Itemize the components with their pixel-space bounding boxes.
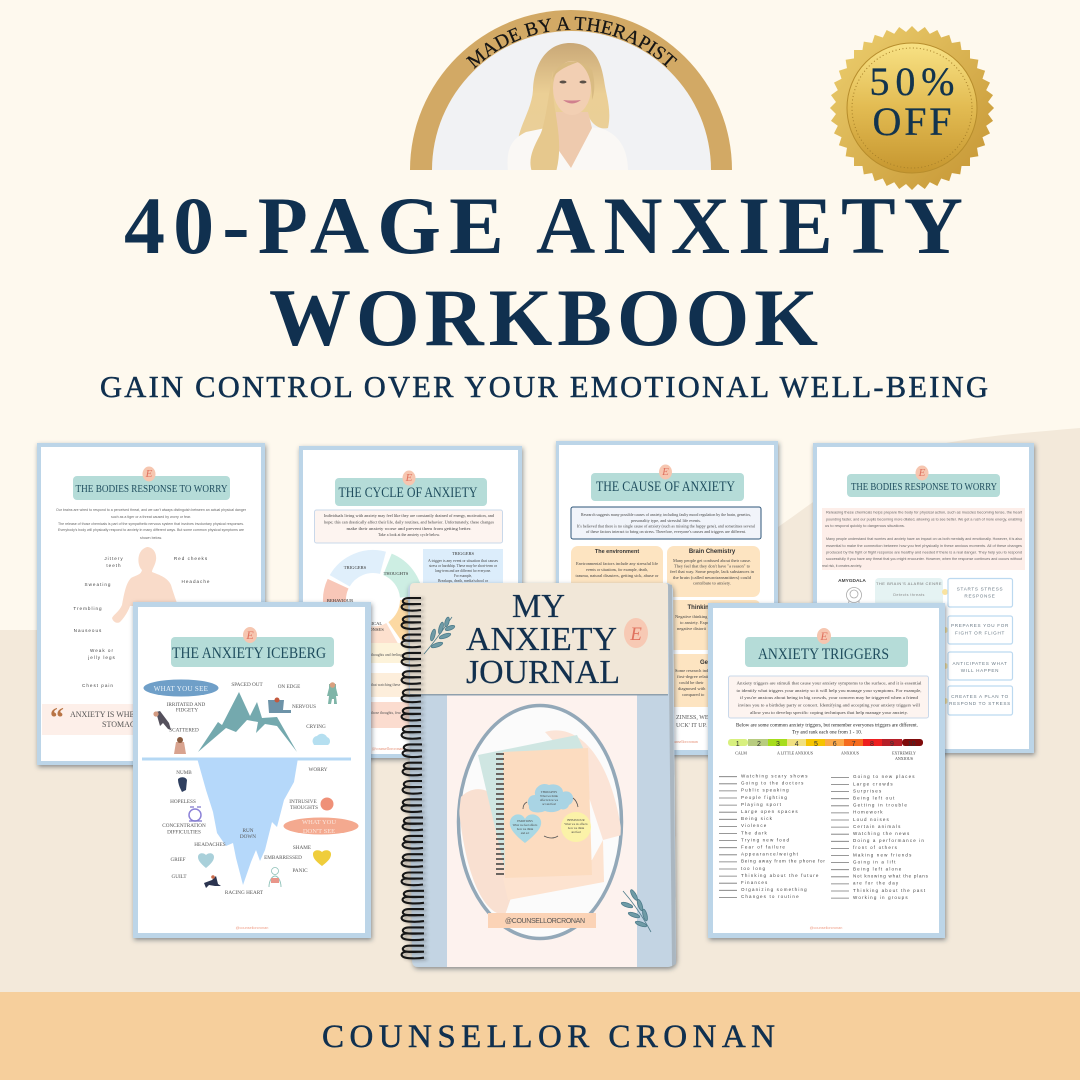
environment box: The environment — [595, 549, 639, 555]
trigger list: left: People fighting — [741, 795, 788, 800]
response boxes: WILL HAPPEN — [961, 668, 999, 673]
triggers box: long-term and are different for everyone. — [435, 568, 491, 573]
intro text — [56, 508, 247, 540]
page heading: THE BODIES RESPONSE TO WORRY — [851, 481, 997, 493]
explanatory text block: real risk, it creates anxiety. — [822, 564, 862, 568]
trigger list: right: front of others — [853, 845, 898, 850]
mini cycle text: BEHAVIOUR — [567, 818, 585, 822]
trigger list: right: are for the day — [853, 881, 899, 886]
journal title: JOURNAL — [466, 654, 620, 691]
iceberg labels: EMBARRESSED — [264, 855, 302, 861]
symptom labels: teeth — [106, 563, 122, 568]
badge text: 50% — [870, 59, 954, 104]
amygdala label: AMYGDALA — [838, 578, 866, 584]
response boxes: STARTS STRESS — [957, 586, 1003, 592]
trigger list: left: Appearance/weight — [741, 852, 799, 857]
anxiety scale: 7 — [852, 741, 856, 748]
arch ring — [410, 10, 732, 170]
title — [124, 180, 963, 363]
mini cycle text: What we think — [540, 794, 558, 798]
intro box: Individuals living with anxiety may feel like they are constantly drained of energy, motivation, and — [324, 513, 495, 519]
journal title: ANXIETY — [466, 621, 617, 658]
page frame — [813, 443, 1034, 753]
cover page edge — [668, 584, 676, 966]
handle label — [488, 913, 596, 928]
page frame — [299, 446, 522, 758]
page frame — [708, 603, 945, 938]
trigger list: left: Fear of failure — [741, 844, 786, 850]
background wave — [0, 428, 1080, 1080]
response boxes: ANTICIPATES WHAT — [952, 661, 1008, 666]
footer note: ounsellorcronan — [672, 739, 698, 744]
trigger list: right: Doing a performance in — [853, 838, 925, 843]
page heading: E — [819, 629, 828, 643]
body silhouette — [112, 547, 178, 623]
explanatory text block: pounding faster, and our pupils becoming more dilated, allowing us to see better. We get a rush of more energy, enabling — [826, 518, 1022, 522]
anxiety scale: 4 — [795, 741, 799, 748]
page heading: E — [145, 468, 153, 480]
quote band: ANXIETY IS WHEN YOUR — [70, 710, 165, 719]
iceberg labels: GUILT — [171, 874, 187, 880]
genetics box: Ge — [700, 660, 709, 666]
panel: bodies response (right) — [813, 443, 1034, 753]
iceberg labels: ON EDGE — [278, 684, 300, 690]
trigger list: right: Being left out — [853, 796, 895, 800]
intro box: Take a look at the anxiety cycle below. — [378, 532, 440, 537]
response boxes: RESPOND TO STRESS — [949, 701, 1011, 706]
thinking box: to anxiety. Expe — [680, 620, 709, 625]
trigger list: right: Getting in trouble — [853, 803, 908, 808]
footer handle: @counsellorcronan — [810, 926, 842, 930]
cycle labels: THOUGHTS — [384, 571, 409, 576]
lower stripes: those thoughts, fear — [371, 711, 402, 716]
page heading: THE CAUSE OF ANXIETY — [596, 479, 735, 495]
trigger list: right: Loud noises — [853, 817, 890, 822]
iceberg labels: SCATTERED — [169, 728, 199, 734]
footer note: UCK' IT UP. — [676, 723, 707, 729]
anxiety scale: 1 — [736, 741, 740, 748]
genetics box: first-degree relativ — [677, 674, 711, 679]
alarm centre box: THE BRAIN'S ALARM CENRE — [876, 581, 942, 586]
alarm centre box: Detects threats — [893, 593, 925, 597]
lower stripes: @counsellorcronan — [372, 746, 403, 751]
anxiety scale: 6 — [833, 741, 837, 748]
symptom labels: Jittery — [104, 556, 124, 561]
intro box: Anxiety triggers are stimuli that cause your anxiety symptoms to the surface, and it is essential — [736, 680, 922, 686]
intro box — [728, 676, 928, 718]
page heading: THE CYCLE OF ANXIETY — [338, 485, 478, 501]
trigger list: left: The dark — [741, 830, 768, 835]
symptom labels: jelly legs — [87, 655, 116, 660]
page heading: ANXIETY TRIGGERS — [758, 646, 889, 663]
anxiety scale: 8 — [870, 741, 874, 748]
genetics box: could be their — [679, 680, 704, 685]
page heading — [171, 627, 334, 667]
brain chemistry box: contribute to anxiety. — [693, 580, 731, 586]
iceberg labels: GRIEF — [170, 857, 186, 863]
explanatory text block: essential to make the connection between how you feel physically in these anxious moments. All of these changes — [826, 544, 1022, 548]
iceberg labels: IRRITATED AND — [167, 702, 206, 708]
mini cycle text: What we feel affects — [513, 823, 538, 827]
trigger list: left: Large open spaces — [741, 809, 799, 814]
intro text: Our brains are wired to respond to a perceived threat, and we can't always distinguish between an actual physical danger — [56, 508, 247, 512]
genetics box — [620, 654, 760, 707]
panel: cause of anxiety — [556, 441, 778, 755]
response boxes: FIGHT OR FLIGHT — [955, 630, 1005, 636]
iceberg labels: WORRY — [308, 767, 328, 773]
footer handle: @counsellorcronan — [236, 926, 268, 930]
icon: brain head — [846, 588, 862, 606]
brain chemistry box — [667, 546, 760, 597]
scale instructions: Below are some common anxiety triggers, but remember everyones triggers are different. — [736, 724, 918, 728]
intro text: Everybody's body will physically respond to anxiety in many different ways. But some common physical symptoms are — [58, 528, 244, 532]
what you see pill — [144, 680, 218, 696]
trigger list: left: Watching scary shows — [741, 774, 809, 778]
cycle labels: BEHAVIOUR — [327, 598, 354, 603]
what you don't see pill — [284, 818, 358, 835]
what you see pill: WHAT YOU SEE — [154, 685, 208, 693]
environment box: trauma, natural disasters, getting sick, abuse or — [576, 573, 659, 579]
icon: leaf bottom — [621, 889, 651, 932]
symptom labels: Headache — [182, 579, 210, 584]
iceberg labels: INTRUSIVE — [289, 799, 317, 805]
scale labels: A LITTLE ANXIOUS — [777, 750, 813, 756]
thinking box: negative distorti — [677, 626, 707, 631]
symptom labels: Weak or — [90, 648, 114, 653]
symptom labels: Trembling — [73, 606, 103, 611]
trigger list: right: Homework — [853, 810, 884, 815]
triggers box — [423, 549, 503, 585]
trigger list: left: Thinking about the future — [741, 873, 820, 878]
explanatory text block: Many people understand that worries and anxiety have an impact on us both mentally and emotionally. However, it is also — [826, 537, 1022, 541]
cycle labels: RESPONSES — [358, 627, 384, 632]
cover title band — [410, 583, 668, 695]
iceberg labels: CONCENTRATION — [162, 823, 206, 829]
page heading: THE ANXIETY ICEBERG — [172, 645, 326, 662]
page heading — [335, 470, 487, 506]
mini cycle text: What we do affects — [564, 822, 588, 826]
anxiety scale: 9 — [890, 741, 894, 748]
trigger list: right: Surprises — [853, 788, 882, 793]
logo — [624, 618, 648, 648]
trigger list: right: Going to new places — [853, 774, 916, 779]
quote band: “ — [50, 703, 64, 734]
brain chemistry box: the brain (called neurotransmitters) could — [673, 575, 752, 580]
triggers box: TRIGGERS — [452, 551, 474, 556]
page heading — [745, 628, 908, 667]
mini cycle text: and feel — [571, 830, 581, 834]
trigger list: right: Not knowing what the plans — [853, 874, 929, 879]
scale labels: ANXIOUS — [895, 756, 913, 761]
footer brand: COUNSELLOR CRONAN — [322, 1019, 775, 1055]
waterline — [142, 758, 351, 760]
mountain — [198, 692, 297, 752]
trigger list: left: Finances — [741, 880, 768, 885]
iceberg labels: SPACED OUT — [231, 682, 264, 688]
lower stripes — [314, 643, 502, 751]
page heading: E — [405, 472, 413, 484]
explanatory text block — [822, 508, 1025, 570]
intro box: if you're anxious about being in big crowds, your concern may be triggered when a friend — [740, 695, 919, 701]
explanatory text block: us to respond quickly to dangerous situations. — [825, 524, 905, 528]
brain chemistry box: feel that way. Some people, lack substances in — [670, 569, 755, 575]
spiral binding — [402, 598, 424, 958]
page heading: THE BODIES RESPONSE TO WORRY — [76, 483, 228, 495]
mini cycle text — [513, 790, 588, 835]
triggers box: For example, — [454, 573, 472, 579]
page heading: E — [661, 466, 669, 478]
alarm centre box — [875, 578, 943, 606]
page heading — [591, 464, 744, 501]
mini cycle text: affects how we — [540, 798, 559, 802]
explanatory text block: produced by the fight or flight response are healthy and needed if there is a real danger. They help you to respond — [826, 550, 1022, 554]
iceberg labels: DOWN — [240, 834, 256, 840]
intro box — [314, 510, 502, 543]
triggers box: Breakups, death, media/school or — [438, 578, 488, 584]
thinking box: Negative thinking — [675, 614, 708, 619]
iceberg labels: PANIC — [292, 868, 308, 874]
logo: E — [629, 624, 642, 645]
intro box: It's believed that there is no single cause of anxiety (such as missing the happy gene), and sometimes several — [577, 524, 756, 530]
environment box: Environmental factors include any stressful life — [576, 561, 658, 566]
intro box: invites you to a birthday party or concert. Identifying and accepting your anxiety triggers will — [738, 702, 921, 708]
anxiety scale: 10 — [908, 741, 916, 748]
badge starburst — [830, 26, 994, 190]
scale instructions — [736, 724, 918, 736]
what you don't see pill: WHAT YOU — [302, 819, 336, 826]
trigger list: left: Being away from the phone for — [741, 859, 826, 864]
oval photo — [458, 706, 622, 938]
footer band — [0, 992, 1080, 1080]
title: WORKBOOK — [269, 272, 818, 363]
trigger list: left: Trying new food — [741, 837, 790, 842]
intro box: personality type, and stressful life events. — [631, 518, 701, 524]
trigger list: left: too long — [741, 866, 766, 871]
intro box: Research suggests many possible causes of anxiety, including faulty mood regulation by the brain, genetics, — [581, 512, 751, 518]
trigger list: left: Violence — [741, 823, 767, 828]
iceberg labels: DIFFICULTIES — [167, 830, 201, 836]
page frame — [133, 602, 371, 938]
trigger list: right: Watching the news — [853, 831, 910, 836]
page heading: E — [245, 628, 254, 642]
trigger list: right: Certain animals — [853, 824, 902, 829]
environment box — [571, 546, 663, 596]
symptom labels: Nauseous — [74, 628, 102, 633]
brain chemistry box: They feel that they don't have "a reason" to — [674, 564, 751, 568]
iceberg labels: HEADACHES — [194, 842, 226, 848]
title: 40-PAGE ANXIETY — [124, 180, 963, 271]
trigger list: right: Being left alone — [853, 866, 902, 872]
genetics box: diagnosed with — [678, 686, 706, 691]
brain chemistry box: Many people get confused about their cause. — [673, 558, 751, 563]
intro box: allow you to develop specific coping techniques that help manage your anxiety. — [750, 710, 908, 715]
genetics box: compared to — [682, 692, 705, 697]
intro text: such as a tiger or a threat caused by worry or fear. — [111, 515, 191, 519]
quote band — [42, 703, 257, 735]
explanatory text block: successfully if you have any threat that you might encounter. However, when the response continues and occurs without — [826, 557, 1022, 561]
symptom labels: Chest pain — [82, 683, 114, 688]
cycle labels: TRIGGERS — [344, 565, 367, 570]
cover base — [408, 583, 676, 967]
trigger list: right: Making new friends — [853, 852, 912, 857]
panel: anxiety iceberg — [133, 602, 371, 938]
thinking box: Thinking — [688, 605, 713, 611]
subtitle: GAIN CONTROL OVER YOUR EMOTIONAL WELL-BEING — [100, 370, 988, 404]
page frame — [556, 441, 778, 755]
icons: figures — [153, 682, 338, 888]
intro text: shown below. — [140, 536, 162, 540]
iceberg labels: NUMB — [176, 770, 192, 776]
cycle labels: PHYSICAL — [360, 621, 382, 626]
arch caption: MADE BY A THERAPIST — [466, 16, 678, 69]
mini cycle text: and act — [521, 831, 529, 835]
trigger list: left: Organizing something — [741, 887, 808, 892]
trigger list: left: Playing sport — [741, 802, 782, 807]
mini cycle: thoughts cloud — [528, 784, 573, 812]
scale labels — [735, 750, 916, 761]
symptom labels: Sweating — [85, 582, 111, 587]
trigger list: left: Going to the doctors — [741, 781, 805, 786]
response boxes: PREPARES YOU FOR — [951, 623, 1009, 628]
mini cycle text: act and feel — [542, 802, 556, 806]
mini cycle text: how we think — [568, 826, 585, 830]
journal title — [466, 588, 620, 691]
quote band: STOMACH — [102, 720, 141, 729]
explanatory text block: Releasing these chemicals helps prepare the body for physical action, such as muscles becoming tense, the heart — [826, 510, 1022, 514]
scale instructions: Try and rank each one from 1 - 10. — [792, 730, 862, 736]
anxiety scale: 2 — [757, 741, 761, 748]
scale labels: EXTREMELY — [892, 750, 916, 756]
anxiety scale: 3 — [776, 741, 780, 748]
panel: bodies response (left) — [37, 443, 265, 765]
badge: 50% off — [830, 26, 994, 190]
mini cycle: emotions heart — [510, 814, 541, 843]
what you don't see pill: DON'T SEE — [303, 828, 335, 835]
intro text: The release of those chemicals is part of the sympathetic nervous system that involves involuntary physical responses. — [58, 522, 244, 526]
anxiety scale: 5 — [814, 741, 818, 748]
icon: leaf top — [424, 617, 455, 654]
mini cycle text: how we think — [517, 827, 534, 831]
triggers box: stress or hardship. These may be short-term or — [429, 563, 497, 568]
mini cycle arrows — [523, 798, 578, 838]
iceberg labels: RACING HEART — [225, 890, 264, 896]
thinking box — [620, 600, 760, 650]
mini cycle text: THOUGHTS — [541, 790, 557, 794]
environment box: events or situations, for example, death, — [586, 567, 648, 573]
response boxes — [942, 578, 1012, 715]
response boxes: CREATES A PLAN TO — [951, 694, 1009, 699]
badge seal — [847, 43, 977, 173]
panel: cycle of anxiety — [299, 446, 522, 758]
trigger list: right — [831, 774, 929, 900]
scale labels: ANXIOUS — [841, 750, 859, 756]
submerged iceberg — [197, 758, 298, 885]
scale labels: CALM — [735, 750, 747, 756]
iceberg labels: NERVOUS — [292, 704, 316, 710]
handle label: @COUNSELLORCRONAN — [505, 918, 585, 925]
footer note — [672, 715, 718, 744]
iceberg labels: RUN — [243, 828, 254, 834]
badge text: OFF — [872, 99, 952, 144]
trigger list: left — [719, 774, 826, 899]
trigger list: left: Public speaking — [741, 788, 790, 793]
trigger list: right: Working in groups — [853, 895, 909, 900]
pink centre panel — [447, 695, 637, 967]
page heading: E — [918, 467, 926, 479]
footer note: ZINESS, WEAK — [676, 715, 718, 721]
mini cycle text: EMOTIONS — [517, 819, 533, 823]
page frame — [37, 443, 265, 765]
iceberg labels: FIDGETY — [176, 708, 198, 714]
cycle labels — [327, 565, 409, 632]
mini cycle: behaviour circle — [561, 812, 591, 842]
response boxes: RESPONSE — [964, 594, 996, 598]
panel: journal cover — [408, 583, 676, 967]
trigger list: left: Being sick — [741, 816, 773, 821]
intro box: hope; this can drastically affect their life, daily routines, and behavior. Unfortunately, these changes — [324, 520, 494, 526]
intro box — [571, 507, 761, 539]
symptom labels — [73, 556, 210, 688]
trigger list: right: Going in a lift — [853, 859, 897, 864]
intro box: make their anxiety worse and prevent them from getting better. — [346, 526, 472, 531]
page heading — [73, 466, 230, 500]
trigger list: right: Thinking about the past — [853, 888, 926, 893]
triggers box: A trigger is any event or situation that causes — [428, 558, 498, 563]
genetics box: Some research ind — [675, 668, 709, 673]
lower stripes: that watching these — [371, 683, 401, 687]
intro box: of these factors interact to bring on stress. Therefore, everyone's causes and triggers are different. — [586, 529, 746, 535]
panel: anxiety triggers — [708, 603, 945, 938]
brain chemistry box: Brain Chemistry — [689, 549, 736, 555]
trigger list: left: Changes to routine — [741, 894, 800, 899]
anxiety scale — [728, 739, 923, 748]
iceberg labels: THOUGHTS — [290, 805, 318, 811]
page heading — [847, 466, 1000, 497]
lower stripes: thoughts and feelings — [371, 653, 404, 657]
iceberg labels: SHAME — [293, 845, 311, 851]
trigger list: right: Large crowds — [853, 781, 894, 786]
iceberg labels: HOPELESS — [170, 799, 196, 805]
symptom labels: Red cheeks — [174, 556, 208, 561]
iceberg labels: CRYING — [306, 724, 326, 730]
arch portrait — [410, 10, 732, 170]
portrait photo — [430, 30, 715, 172]
cycle diagram — [334, 561, 412, 638]
intro box: to identify what triggers your anxiety so it will help you manage your symptoms. For example, — [736, 688, 922, 694]
iceberg labels — [162, 682, 328, 896]
journal title: MY — [512, 588, 565, 625]
